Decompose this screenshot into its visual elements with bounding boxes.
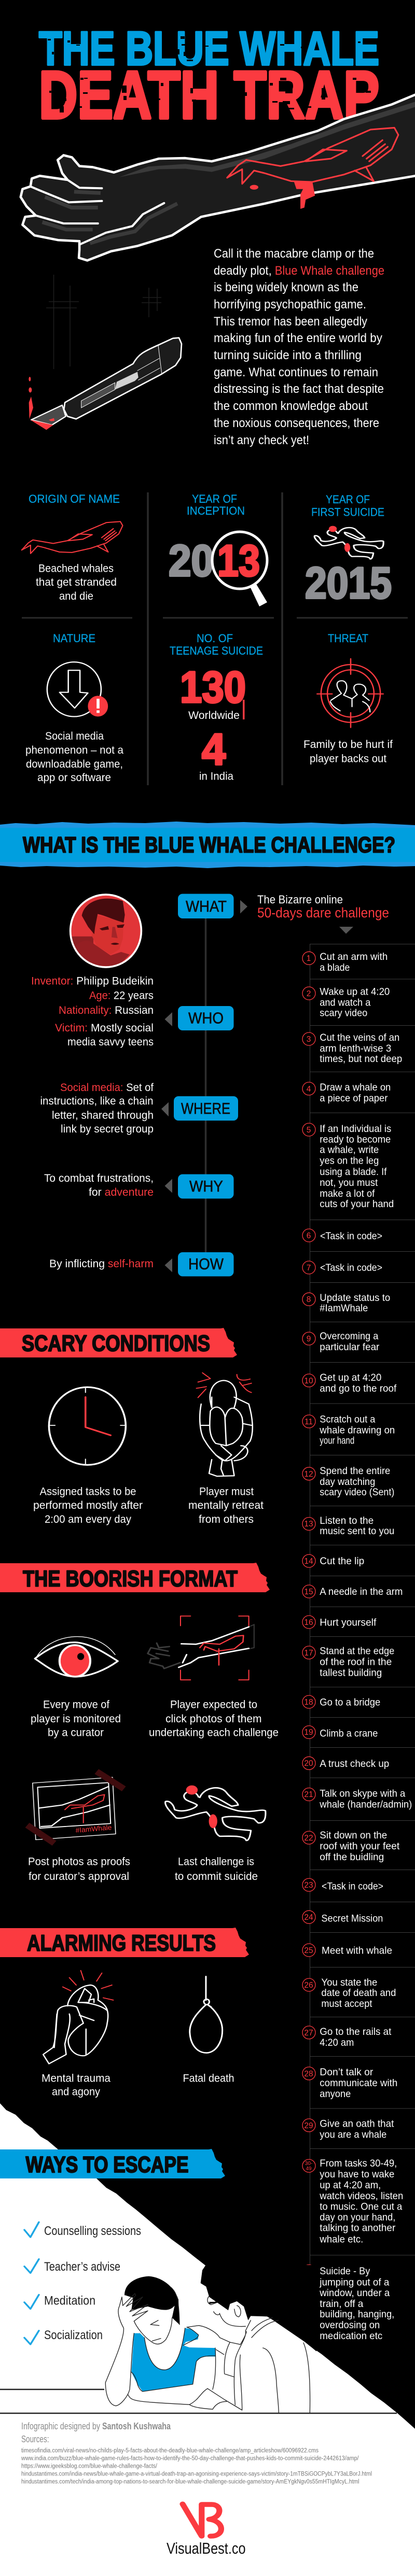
section banner: the boorish format: THE BOORISH FORMAT [23, 1566, 238, 1591]
checklist: ways to escape: Teacher’s advise [44, 2260, 120, 2274]
panel: origin of name: Beached whales [38, 563, 114, 574]
panel: year of first suicide: 2015 [305, 559, 392, 608]
intro text block: deadly plot, Blue Whale challenge [214, 264, 384, 278]
steps list: 50 day tasks: Listen to the [320, 1515, 374, 1526]
panel: post photos as proofs: Post photos as proofs [28, 1856, 130, 1868]
text block: where: letter, shared through [52, 1109, 154, 1122]
footer: credits and sources: Infographic designed by Santosh Kushwaha [21, 2421, 171, 2431]
text block: where: link by secret group [61, 1123, 154, 1135]
panel: origin of name [22, 492, 123, 602]
steps list: 50 day tasks: <Task in code> [322, 1880, 383, 1892]
icon: eye [35, 1637, 118, 1677]
steps list: 50 day tasks: Secret Mission [321, 1913, 383, 1924]
steps list: 50 day tasks: Get up at 4:20 [320, 1372, 381, 1383]
steps list: 50 day tasks: 3 [307, 1035, 311, 1044]
steps list: 50 day tasks: 11 [305, 1418, 313, 1426]
steps list: 50 day tasks: 25 [304, 1946, 313, 1955]
footer: credits and sources: hindustantimes.com/tech/india-among-top-nations-to-search-for-blue-whale-challenge-suicide-game/story-AmEYgkNgv0s55mHTIgMcyL.html [21, 2479, 359, 2485]
illustration: doctor consoling woman [105, 2265, 316, 2413]
panel: threat: THREAT [328, 632, 368, 645]
icon: curled up person [197, 1373, 253, 1476]
steps list: 50 day tasks: must accept [321, 1998, 372, 2009]
section banner: ways to escape: WAYS TO ESCAPE [26, 2152, 189, 2177]
steps list: 50 day tasks: overdosing on [320, 2319, 380, 2331]
steps list: 50 day tasks: Go to a bridge [320, 1697, 380, 1708]
text block: who: Age: 22 years [89, 989, 154, 1002]
steps list: 50 day tasks: particular fear [320, 1341, 380, 1353]
footer: credits and sources: timesofindia.com/viral-news/no-childs-play-5-facts-about-the-deadly-blue-whale-challenge/amp_articleshow/60096922.cms [21, 2448, 319, 2454]
panel: fatal death [183, 1976, 234, 2085]
text block: why [44, 1172, 154, 1198]
panel: mental retreat condition: mentally retreat [188, 1499, 264, 1511]
button: what: WHAT [186, 897, 227, 915]
intro text block: Call it the macabre clamp or the [214, 247, 374, 261]
steps list: 50 day tasks: Scratch out a [320, 1414, 375, 1425]
button: who [178, 1006, 233, 1030]
panel: photos of each challenge: Player expected to [170, 1699, 257, 1710]
steps list: 50 day tasks: <Task in code> [320, 1262, 382, 1273]
panel: mental retreat condition: Player must [199, 1485, 254, 1497]
button: why [178, 1174, 233, 1198]
panel: origin of name: and die [59, 590, 93, 602]
steps list: 50 day tasks: Update status to [320, 1292, 390, 1304]
icon: utility knife [29, 338, 182, 430]
icon: clock at 2 [49, 1387, 126, 1465]
icon: download warning [47, 662, 108, 717]
icon: body outline [165, 1786, 266, 1841]
intro text block: turning suicide into a thrilling [214, 348, 362, 362]
panel: origin of name: that get stranded [36, 576, 117, 588]
white torn background [0, 2103, 415, 2576]
button: how: HOW [188, 1255, 224, 1273]
panel: clock condition [33, 1387, 143, 1525]
text block: what [257, 893, 389, 921]
text block: why: To combat frustrations, [44, 1172, 154, 1184]
panel: year of inception [169, 492, 267, 606]
panel: number of teenage suicides: 130 [180, 663, 246, 712]
panel: photos of each challenge [148, 1616, 279, 1738]
steps list: 50 day tasks: of the roof in the [320, 1657, 392, 1668]
panel: mental trauma: and agony [52, 2086, 100, 2098]
panel: post photos as proofs: for curator’s approval [29, 1871, 129, 1883]
steps list: 50 day tasks: 8 [307, 1295, 311, 1304]
steps list: 50 day tasks: From tasks 30-49, [320, 2158, 397, 2169]
panel: threat: player backs out [310, 753, 386, 765]
panel: year of first suicide: FIRST SUICIDE [311, 506, 384, 518]
text block: who: Victim: Mostly social [55, 1022, 154, 1034]
panel: clock condition: Assigned tasks to be [39, 1485, 136, 1497]
steps list: 50 day tasks: you have to wake [320, 2169, 394, 2180]
section banner: alarming results: ALARMING RESULTS [27, 1930, 216, 1956]
steps list: 50 day tasks: 13 [304, 1520, 313, 1528]
panel: mental retreat condition: from others [199, 1513, 254, 1525]
steps list: 50 day tasks: whale etc. [319, 2234, 363, 2245]
steps list: 50 day tasks: scary video [320, 1008, 367, 1019]
steps list: 50 day tasks: 9 [307, 1335, 311, 1343]
steps list: 50 day tasks: #IamWhale [320, 1303, 368, 1314]
icon: polaroid with tape [27, 1772, 124, 1843]
panel: clock condition: 2:00 am every day [45, 1513, 131, 1525]
panel: nature: phenomenon – not a [25, 744, 123, 756]
text block: what: The Bizarre online [257, 893, 343, 906]
panel: year of first suicide [305, 493, 392, 608]
steps list: 50 day tasks: scary video (Sent) [320, 1487, 394, 1498]
steps list: 50 day tasks: window, under a [319, 2287, 390, 2299]
steps list: 50 day tasks: 21 [304, 1790, 313, 1799]
panel: number of teenage suicides: in India [199, 770, 233, 783]
panel: photos of each challenge: click photos of them [165, 1713, 261, 1725]
icon: whale [22, 521, 123, 554]
steps list: 50 day tasks: medication etc [320, 2330, 383, 2342]
steps list: 50 day tasks: a piece of paper [320, 1093, 388, 1104]
panel: last challenge: to commit suicide [175, 1871, 258, 1883]
panel: year of inception: 20 [169, 536, 214, 586]
panel: monitored by curator: Every move of [43, 1699, 109, 1710]
steps list: 50 day tasks: ready to become [320, 1134, 391, 1145]
checklist: ways to escape: Socialization [44, 2328, 103, 2342]
intro text block: distressing is the fact that despite [214, 382, 384, 396]
panel: year of inception: YEAR OF [192, 492, 237, 505]
steps list: 50 day tasks: Climb a crane [320, 1728, 378, 1739]
steps list: 50 day tasks: and watch a [320, 997, 370, 1009]
text block: who: media savvy teens [67, 1036, 154, 1048]
section banner: what is the blue whale challenge [0, 822, 415, 868]
steps list: 50 day tasks: A trust check up [320, 1758, 389, 1770]
panel: year of inception: INCEPTION [187, 504, 245, 517]
steps list: 50 day tasks: roof with your feet [320, 1841, 400, 1852]
steps list: 50 day tasks: train, off a [320, 2298, 363, 2310]
steps list: 50 day tasks: Cut an arm with [320, 951, 388, 963]
steps list: 50 day tasks: Wake up at 4:20 [320, 986, 390, 998]
panel: monitored by curator [31, 1637, 121, 1738]
steps list: 50 day tasks: and go to the roof [320, 1383, 397, 1394]
steps list: 50 day tasks: 20 [304, 1759, 313, 1768]
button: who: WHO [188, 1009, 224, 1027]
steps list: 50 day tasks: 5 [307, 1126, 311, 1135]
panel: threat [303, 632, 393, 765]
whale carving [227, 128, 398, 209]
intro text block: isn’t any check yet! [214, 433, 309, 447]
steps list: 50 day tasks: 4 [307, 1085, 311, 1094]
steps list: 50 day tasks: day on your hand, [320, 2212, 395, 2223]
steps list: 50 day tasks: watch videos, listen [319, 2190, 403, 2202]
panel: nature [25, 632, 123, 784]
steps list: 50 day tasks: 10 [304, 1377, 313, 1385]
steps list: 50 day tasks: 49 [306, 2166, 312, 2172]
steps list: 50 day tasks: a whale, write [320, 1144, 379, 1156]
steps list: 50 day tasks: make a lot of [320, 1188, 375, 1199]
text block: who: Nationality: Russian [59, 1004, 154, 1016]
steps list: 50 day tasks: Don’t talk or [320, 2067, 374, 2078]
icon: noose [190, 1976, 223, 2053]
panel: post photos as proofs: #IamWhale [75, 1823, 112, 1834]
intro text block: making fun of the entire world by [214, 331, 382, 345]
footer: credits and sources: www.india.com/buzz/blue-whale-game-rules-facts-how-to-identify-the-50-day-challenge-that-pushes-kids-to-commit-suicide-2442613/amp/ [21, 2456, 359, 2462]
steps list: 50 day tasks: 18 [304, 1698, 313, 1707]
steps list: 50 day tasks: your hand [320, 1435, 354, 1447]
icon: checks [24, 2222, 39, 2344]
woman's hair [125, 2276, 179, 2325]
steps list: 50 day tasks: 29 [304, 2121, 313, 2130]
steps list: 50 day tasks: 12 [304, 1470, 313, 1479]
steps list: 50 day tasks [302, 951, 412, 2342]
steps list: 50 day tasks: Cut the veins of an [320, 1032, 399, 1043]
steps list: 50 day tasks: whale (hander/admin) [319, 1799, 412, 1810]
steps list: 50 day tasks: If an Individual is [320, 1123, 392, 1135]
steps list: 50 day tasks: Spend the entire [320, 1465, 390, 1477]
steps list: 50 day tasks: 16 [304, 1618, 313, 1627]
steps list: 50 day tasks: you are a whale [320, 2129, 386, 2141]
icon: camera frame with arm [148, 1616, 254, 1680]
panel: number of teenage suicides: NO. OF [197, 632, 233, 645]
steps list: 50 day tasks: 14 [304, 1557, 313, 1566]
arrows: timeline pointers [161, 900, 353, 1272]
illustration: arm with whale carving [21, 91, 415, 261]
intro text block: is being widely known as the [214, 280, 358, 294]
panel: nature: downloadable game, [26, 758, 123, 770]
steps list: 50 day tasks: 2 [307, 989, 311, 998]
steps list: 50 day tasks: a blade [320, 962, 350, 973]
text block: how: By inflicting self-harm [49, 1257, 154, 1270]
timeline spine [205, 917, 206, 1253]
steps list: 50 day tasks: Give an oath that [320, 2118, 394, 2130]
steps list: 50 day tasks: Hurt yourself [320, 1617, 377, 1629]
panel: mental trauma: Mental trauma [42, 2072, 110, 2085]
steps list: 50 day tasks: 4:20 am [320, 2037, 354, 2048]
panel: post photos as proofs [27, 1772, 130, 1883]
intro text block: the noxious consequences, there [214, 416, 379, 430]
logo: VisualBest.co [167, 2504, 246, 2557]
steps list: 50 day tasks: 6 [307, 1232, 311, 1240]
steps list: 50 day tasks: Sit down on the [320, 1830, 387, 1841]
panel: number of teenage suicides: Worldwide [188, 710, 240, 721]
footer: credits and sources: https://www.igeeksblog.com/blue-whale-challenge-facts/ [21, 2463, 158, 2469]
steps list: 50 day tasks: up at 4:20 am, [320, 2179, 381, 2191]
panel: nature: NATURE [53, 632, 95, 645]
text block: where: instructions, like a chain [40, 1095, 154, 1107]
steps list: 50 day tasks: date of death and [321, 1987, 396, 1999]
steps list: 50 day tasks: arm lenth-wise 3 [320, 1043, 391, 1054]
panel: photos of each challenge: undertaking each challenge [149, 1727, 279, 1738]
steps list: 50 day tasks: 1 [307, 954, 311, 963]
panel: fatal death: Fatal death [183, 2072, 234, 2085]
button: where [174, 1096, 238, 1121]
steps list: 50 day tasks: 7 [307, 1264, 311, 1272]
panel: clock condition: performed mostly after [33, 1499, 143, 1511]
woman's top [131, 2328, 215, 2391]
steps list: 50 day tasks: 50 [304, 2267, 313, 2276]
steps list: 50 day tasks: 30- [305, 2161, 312, 2167]
intro text block: game. What continues to remain [214, 365, 378, 379]
text block: why: for adventure [89, 1186, 154, 1198]
steps list: 50 day tasks: Go to the rails at [320, 2026, 392, 2037]
steps list: 50 day tasks: 22 [304, 1834, 313, 1843]
steps list: 50 day tasks: not, you must [320, 1177, 378, 1188]
footer: credits and sources: Sources: [21, 2434, 49, 2444]
checklist: ways to escape [24, 2222, 141, 2344]
steps list dividers [310, 944, 415, 2342]
panel: mental retreat condition [188, 1373, 264, 1525]
panel: year of inception: 13 [217, 536, 260, 586]
steps list: 50 day tasks: whale drawing on [319, 1425, 395, 1436]
steps list: 50 day tasks: music sent to you [320, 1525, 394, 1537]
steps list: 50 day tasks: Overcoming a [320, 1331, 378, 1342]
footer: credits and sources [21, 2421, 372, 2485]
steps list: 50 day tasks: 15 [304, 1588, 313, 1596]
table lines [0, 2389, 397, 2413]
steps list: 50 day tasks: using a blade. If [320, 1166, 387, 1178]
steps list: 50 day tasks: Cut the lip [320, 1555, 364, 1567]
icon: magnifier [212, 532, 267, 606]
steps list: 50 day tasks: tallest building [320, 1667, 382, 1678]
steps list: 50 day tasks: 19 [304, 1728, 313, 1737]
steps list: 50 day tasks: 17 [304, 1649, 313, 1658]
text block: what: 50-days dare challenge [257, 905, 389, 921]
panel: monitored by curator: by a curator [48, 1727, 104, 1738]
intro text block: horrifying psychopathic game. [214, 298, 366, 312]
panel: last challenge [165, 1786, 266, 1883]
intro text block: the common knowledge about [214, 399, 368, 413]
panel: year of first suicide: YEAR OF [326, 493, 370, 506]
panel: origin of name: ORIGIN OF NAME [29, 492, 120, 505]
checklist: ways to escape: Meditation [44, 2294, 95, 2308]
steps list: 50 day tasks: 23 [304, 1881, 313, 1890]
footer: credits and sources: hindustantimes.com/india-news/blue-whale-game-a-virtual-death-trap-an-agonising-experience-says-victim/story-1mTBSiGOCPybL7Y3aLBorJ.html [21, 2471, 372, 2478]
panel: monitored by curator: player is monitored [31, 1713, 121, 1725]
steps list: 50 day tasks: jumping out of a [319, 2276, 389, 2288]
steps list: 50 day tasks: to music. One cut a [320, 2201, 402, 2212]
text block: who: Inventor: Philipp Budeikin [31, 974, 154, 987]
text block: who [31, 974, 154, 1048]
text block: where [40, 1081, 154, 1135]
panel: last challenge: Last challenge is [178, 1856, 254, 1868]
panel: number of teenage suicides: 4 [202, 725, 226, 774]
logo: VisualBest.co: VisualBest.co [167, 2539, 246, 2557]
icon: family in crosshair [317, 659, 383, 728]
icon: body outline [314, 526, 383, 559]
section banner: scary conditions: SCARY CONDITIONS [22, 1331, 210, 1356]
steps list: 50 day tasks: 28 [304, 2070, 313, 2078]
button: what [178, 894, 233, 918]
faint scratch marks [46, 275, 161, 369]
steps list: 50 day tasks: cuts of your hand [320, 1198, 394, 1210]
steps list: 50 day tasks: <Task in code> [320, 1230, 382, 1242]
panel: threat: Family to be hurt if [303, 739, 393, 751]
button: where: WHERE [181, 1099, 230, 1117]
steps list: 50 day tasks: Draw a whale on [320, 1082, 391, 1093]
steps list: 50 day tasks: Meet with whale [322, 1945, 392, 1957]
steps list: 50 day tasks: Stand at the edge [320, 1645, 394, 1657]
steps list: 50 day tasks: day watching [320, 1476, 375, 1488]
steps list: 50 day tasks: You state the [321, 1977, 377, 1988]
steps list: 50 day tasks: Talk on skype with a [320, 1788, 405, 1800]
steps list: 50 day tasks: Suicide - By [320, 2266, 370, 2277]
steps list: 50 day tasks: communicate with [320, 2077, 397, 2089]
steps list: 50 day tasks: times, but not deep [320, 1053, 402, 1065]
steps list: 50 day tasks: anyone [320, 2088, 351, 2100]
steps list: 50 day tasks: 24 [304, 1913, 313, 1922]
steps list: 50 day tasks: A needle in the arm [320, 1586, 403, 1597]
steps list: 50 day tasks: 26 [304, 1981, 313, 1990]
steps list: 50 day tasks: 27 [304, 2029, 313, 2037]
panel: nature: Social media [45, 730, 104, 742]
portrait: inventor [69, 894, 144, 968]
intro text block: This tremor has been allegedly [214, 315, 367, 329]
steps list: 50 day tasks: talking to another [320, 2223, 396, 2234]
panel: mental trauma [42, 1971, 113, 2098]
intro text block [214, 247, 384, 447]
panel: nature: app or software [37, 772, 111, 784]
steps list: 50 day tasks: off the buidling [320, 1851, 384, 1863]
panel: number of teenage suicides: TEENAGE SUICIDE [170, 644, 263, 657]
steps list: 50 day tasks: yes on the leg [320, 1155, 379, 1166]
title [39, 22, 379, 133]
button: how [178, 1252, 233, 1276]
man's hair [201, 2265, 316, 2352]
icon: hunched person [43, 1971, 113, 2064]
text block: where: Social media: Set of [60, 1081, 154, 1094]
steps list: 50 day tasks: building, hanging, [320, 2309, 394, 2320]
checklist: ways to escape: Counselling sessions [44, 2224, 141, 2238]
button: why: WHY [189, 1177, 223, 1195]
panel: number of teenage suicides [170, 632, 263, 783]
